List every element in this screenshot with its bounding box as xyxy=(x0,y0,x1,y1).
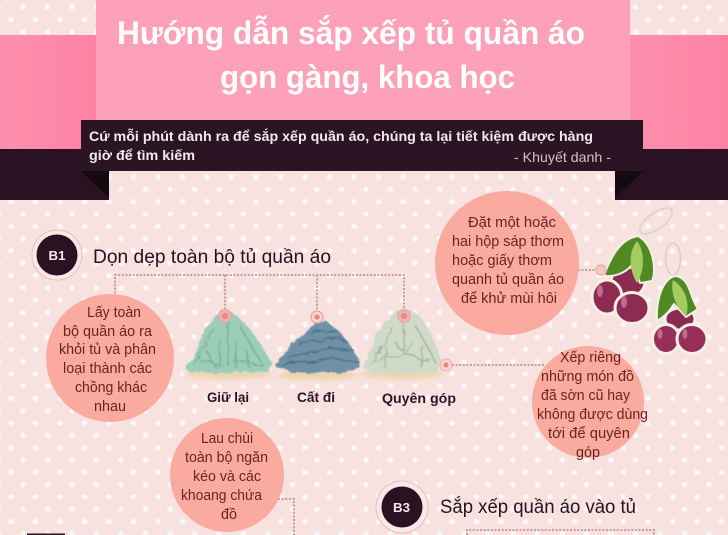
step B3 xyxy=(376,481,636,533)
callout: scented boxes: quanh tủ quần áo xyxy=(452,271,564,288)
callout: donate worn items: không được dùng xyxy=(537,406,648,423)
icon: cherry earring large xyxy=(592,204,676,324)
label: store: Cất đi xyxy=(297,389,335,405)
badge B3: B3 xyxy=(393,500,410,515)
label: keep: Giữ lại xyxy=(207,389,249,405)
callout: donate worn items xyxy=(532,346,648,461)
callout: donate worn items: đã sờn cũ hay xyxy=(541,387,630,404)
callout: sort clothes xyxy=(46,294,174,422)
callout: sort clothes: Lấy toàn xyxy=(87,304,141,321)
marker xyxy=(596,265,606,275)
callout: sort clothes: nhau xyxy=(94,398,126,415)
callout: sort clothes: bộ quần áo ra xyxy=(63,323,153,340)
ribbon tails xyxy=(81,171,643,198)
callout: scented boxes: để khử mùi hôi xyxy=(461,290,557,307)
callout: scented boxes: hoặc giấy thơm xyxy=(452,252,552,269)
title: Hướng dẫn sắp xếp tủ quần áo xyxy=(117,15,585,51)
callout: clean drawers: đồ xyxy=(221,506,237,523)
heading B3: Sắp xếp quần áo vào tủ xyxy=(440,496,636,518)
callout: donate worn items: những món đồ xyxy=(541,368,634,385)
callout: clean drawers: kéo và các xyxy=(193,468,261,485)
callout: clean drawers xyxy=(170,418,284,532)
badge B1: B1 xyxy=(48,248,66,263)
callout: scented boxes: hai hộp sáp thơm xyxy=(452,233,564,250)
icon: cherry earring small xyxy=(652,243,707,354)
icon: pale clothes pile xyxy=(360,309,452,379)
callout: sort clothes: chồng khác xyxy=(75,379,147,396)
label: donate: Quyên góp xyxy=(382,390,456,406)
badge B3 xyxy=(376,481,428,533)
callout: scented boxes xyxy=(435,191,579,335)
badge B1 xyxy=(32,230,82,280)
callout: scented boxes: Đặt một hoặc xyxy=(468,214,556,231)
quote ribbon xyxy=(81,120,643,171)
icon: blue clothes pile xyxy=(275,311,360,380)
quote xyxy=(89,127,593,163)
quote: giờ để tìm kiếm xyxy=(89,147,195,163)
quote: Cứ mỗi phút dành ra để sắp xếp quần áo, chúng ta lại tiết kiệm được hàng xyxy=(89,127,593,144)
callout: clean drawers: toàn bộ ngăn xyxy=(185,449,268,466)
title: gọn gàng, khoa học xyxy=(220,59,515,95)
callout: sort clothes: loại thành các xyxy=(63,360,152,377)
marker xyxy=(398,310,410,322)
badge B2 top edge xyxy=(27,534,65,535)
heading B1: Dọn dẹp toàn bộ tủ quần áo xyxy=(93,247,331,268)
callout: sort clothes: khỏi tủ và phân xyxy=(59,341,156,358)
icon: green clothes pile xyxy=(184,309,272,379)
connector lines xyxy=(115,270,654,535)
header banner xyxy=(0,0,728,200)
callout: clean drawers: Lau chùi xyxy=(201,430,253,447)
callout: donate worn items: góp xyxy=(576,444,600,461)
callout: clean drawers: khoang chứa xyxy=(181,487,263,504)
marker xyxy=(218,310,232,322)
callout: donate worn items: Xếp riêng xyxy=(560,349,621,366)
side bands xyxy=(0,35,728,200)
title xyxy=(117,15,585,95)
step B1 xyxy=(32,230,331,280)
callout: donate worn items: tới để quyên xyxy=(548,425,630,442)
title panel xyxy=(96,0,630,122)
marker xyxy=(311,311,323,323)
marker xyxy=(440,359,452,371)
quote author: - Khuyết danh - xyxy=(514,149,611,165)
